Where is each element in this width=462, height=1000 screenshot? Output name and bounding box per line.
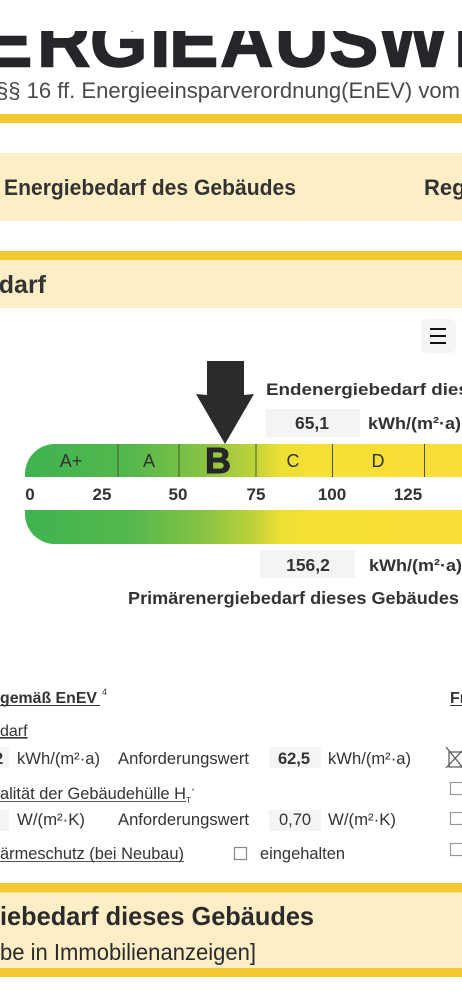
row: Gebäudehülle values: Anforderungswert <box>118 811 249 829</box>
label: Wärmeschutz: ärmeschutz (bei Neubau) <box>0 845 184 863</box>
row: Primärenergiebedarf values <box>0 747 411 768</box>
label: Qualität der Gebäudehülle: T <box>186 796 191 805</box>
value: Endenergiebedarf <box>266 409 461 437</box>
panel: section heading <box>0 251 462 308</box>
scale numbers: 75 <box>247 485 265 504</box>
icon: menu button <box>421 319 456 353</box>
panel: Endenergiebedarf footer: be in Immobilienanzeigen] <box>0 939 256 965</box>
row: Gebäudehülle values: W/(m²·K) <box>328 811 396 829</box>
checkbox: eingehalten: eingehalten <box>260 845 345 863</box>
value: Primärenergiebedarf <box>260 550 462 578</box>
panel: Endenergiebedarf footer <box>0 883 462 977</box>
scale numbers: 100 <box>318 485 346 504</box>
chart: top scale bar: A+ <box>60 451 82 471</box>
chart: top scale bar: A <box>143 451 155 471</box>
chart: top scale bar: D <box>372 451 384 471</box>
icon: rating arrow <box>196 361 254 444</box>
scale numbers <box>25 485 422 504</box>
panel: Energiebedarf heading: Energiebedarf des Gebäudes <box>4 175 296 200</box>
value: Endenergiebedarf: kWh/(m²·a) <box>368 414 461 433</box>
scale numbers: 0 <box>25 485 35 504</box>
checkboxes: right column <box>450 782 462 856</box>
heading: Anforderungen gemäß EnEV: gemäß EnEV <box>0 690 97 707</box>
label: Primärenergiebedarf: Primärenergiebedarf dieses Gebäudes <box>128 588 459 608</box>
chart: top scale bar: C <box>286 451 300 471</box>
value: Primärenergiebedarf: kWh/(m²·a) <box>369 556 462 575</box>
label: Qualität der Gebäudehülle: ' <box>192 787 194 799</box>
chart: bottom scale bar <box>25 510 462 544</box>
scale numbers: 50 <box>169 485 187 504</box>
chart: top scale bar <box>25 440 462 481</box>
panel: Endenergiebedarf footer: iebedarf dieses Gebäudes <box>0 901 314 931</box>
label: Qualität der Gebäudehülle: alität der Gebäudehülle H <box>0 785 186 803</box>
row: Gebäudehülle values <box>0 810 396 831</box>
subtitle: §§ 16 ff. Energieeinsparverordnung(EnEV) vom <box>0 78 460 103</box>
row: Gebäudehülle values: 0,70 <box>279 811 311 829</box>
divider bar: top <box>0 114 462 123</box>
row: Primärenergiebedarf values: kWh/(m²·a) <box>17 750 100 768</box>
row: Gebäudehülle values: W/(m²·K) <box>17 811 85 829</box>
scale numbers: 125 <box>394 485 422 504</box>
icon: checked box <box>446 747 462 768</box>
label: Bedarf: darf <box>0 723 28 740</box>
value: Primärenergiebedarf: 156,2 <box>286 555 330 575</box>
row: Primärenergiebedarf values: kWh/(m²·a) <box>328 750 411 768</box>
scale numbers: 25 <box>93 485 111 504</box>
panel: Energiebedarf heading <box>0 153 462 221</box>
chart: top scale bar: B <box>205 440 231 481</box>
heading: Anforderungen gemäß EnEV: 4 <box>102 687 107 697</box>
row: Primärenergiebedarf values: 62,5 <box>278 750 310 768</box>
row: Primärenergiebedarf values: Anforderungswert <box>118 750 249 768</box>
value: Endenergiebedarf: 65,1 <box>295 413 329 433</box>
